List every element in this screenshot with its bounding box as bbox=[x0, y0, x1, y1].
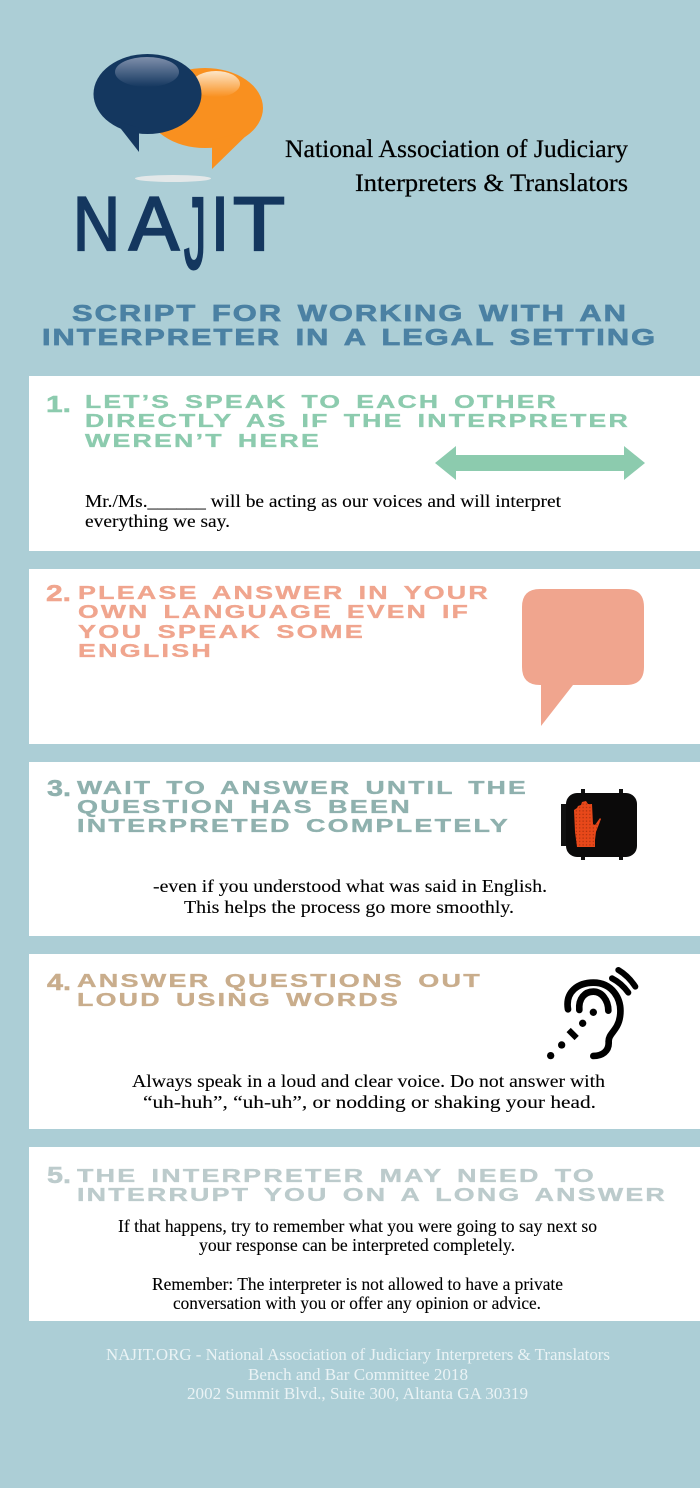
logo wordmark: J bbox=[184, 176, 206, 289]
step 4 heading: LOUD USING WORDS bbox=[77, 990, 400, 1010]
title: INTERPRETER IN A LEGAL SETTING bbox=[42, 324, 657, 350]
step 3 text: -even if you understood what was said in English. bbox=[153, 876, 547, 896]
footer: NAJIT.ORG - National Association of Judiciary Interpreters & Translators bbox=[106, 1345, 610, 1364]
step 5 text: your response can be interpreted completely. bbox=[199, 1235, 515, 1255]
title: SCRIPT FOR WORKING WITH AN bbox=[72, 300, 628, 326]
footer: 2002 Summit Blvd., Suite 300, Altanta GA 30319 bbox=[187, 1384, 528, 1403]
step 5 text: Remember: The interpreter is not allowed to have a private bbox=[152, 1274, 563, 1294]
step 2 heading: ENGLISH bbox=[78, 641, 213, 661]
step 5 heading: THE INTERPRETER MAY NEED TO bbox=[77, 1166, 596, 1186]
panel: step 4 bbox=[29, 954, 700, 1129]
step 3 heading: 3. bbox=[47, 775, 71, 801]
step 3 heading bbox=[47, 775, 528, 836]
icon: speech bubble bbox=[522, 589, 644, 726]
step 1 heading: LET’S SPEAK TO EACH OTHER bbox=[85, 392, 558, 412]
organization name: National Association of Judiciary bbox=[285, 136, 629, 163]
step 5 heading bbox=[47, 1162, 667, 1205]
step 1 text bbox=[85, 491, 561, 531]
step 3 heading: WAIT TO ANSWER UNTIL THE bbox=[77, 778, 528, 798]
panel: step 3 bbox=[29, 762, 700, 936]
step 1 heading: DIRECTLY AS IF THE INTERPRETER bbox=[85, 411, 630, 431]
icon: orange speech bubble bbox=[147, 68, 263, 169]
step 4 heading: ANSWER QUESTIONS OUT bbox=[77, 971, 482, 991]
step 4 text bbox=[132, 1071, 605, 1112]
logo wordmark: N bbox=[73, 182, 120, 267]
step 5 heading: 5. bbox=[47, 1162, 71, 1188]
step 5 heading: INTERRUPT YOU ON A LONG ANSWER bbox=[77, 1185, 667, 1205]
step 2 heading: YOU SPEAK SOME bbox=[78, 622, 365, 642]
organization name bbox=[285, 136, 629, 197]
step 1 text: Mr./Ms.______ will be acting as our voices and will interpret bbox=[85, 491, 561, 511]
logo shadow bbox=[135, 175, 211, 182]
step 1 heading: 1. bbox=[46, 391, 71, 417]
step 4 heading: 4. bbox=[47, 969, 71, 995]
step 3 heading: QUESTION HAS BEEN bbox=[77, 797, 412, 817]
logo wordmark: T bbox=[233, 182, 285, 267]
step 5 text: conversation with you or offer any opinion or advice. bbox=[173, 1293, 541, 1313]
step 5 text: If that happens, try to remember what you were going to say next so bbox=[118, 1216, 597, 1236]
panel: step 5 bbox=[29, 1147, 700, 1321]
step 4 text: Always speak in a loud and clear voice. Do not answer with bbox=[132, 1071, 605, 1091]
footer bbox=[106, 1345, 610, 1403]
panel: step 1 bbox=[29, 376, 700, 551]
icon: pedestrian stop hand signal bbox=[561, 789, 637, 860]
step 2 heading: OWN LANGUAGE EVEN IF bbox=[78, 602, 470, 622]
step 1 text: everything we say. bbox=[85, 511, 230, 531]
step 1 heading bbox=[46, 391, 630, 451]
footer: Bench and Bar Committee 2018 bbox=[248, 1365, 468, 1384]
organization name: Interpreters & Translators bbox=[355, 170, 628, 197]
title bbox=[42, 300, 657, 350]
step 3 heading: INTERPRETED COMPLETELY bbox=[77, 816, 510, 836]
panel: step 2 bbox=[29, 569, 700, 744]
step 2 heading: PLEASE ANSWER IN YOUR bbox=[78, 583, 490, 603]
logo wordmark: I bbox=[211, 182, 229, 267]
step 4 text: “uh-huh”, “uh-uh”, or nodding or shaking your head. bbox=[143, 1092, 596, 1112]
icon: navy speech bubble bbox=[94, 54, 202, 152]
arrow: two-way bbox=[435, 446, 645, 480]
icon: hearing assistance ear bbox=[547, 970, 635, 1059]
logo wordmark: A bbox=[129, 182, 179, 267]
step 2 heading bbox=[46, 580, 490, 661]
logo: NAJIT bbox=[73, 54, 285, 289]
step 4 heading bbox=[47, 969, 482, 1010]
logo wordmark bbox=[73, 176, 285, 289]
step 5 text bbox=[118, 1216, 597, 1313]
step 1 heading: WEREN’T HERE bbox=[85, 431, 321, 451]
step 2 heading: 2. bbox=[46, 580, 71, 606]
step 3 text: This helps the process go more smoothly. bbox=[184, 897, 514, 917]
step 3 text bbox=[153, 876, 547, 917]
